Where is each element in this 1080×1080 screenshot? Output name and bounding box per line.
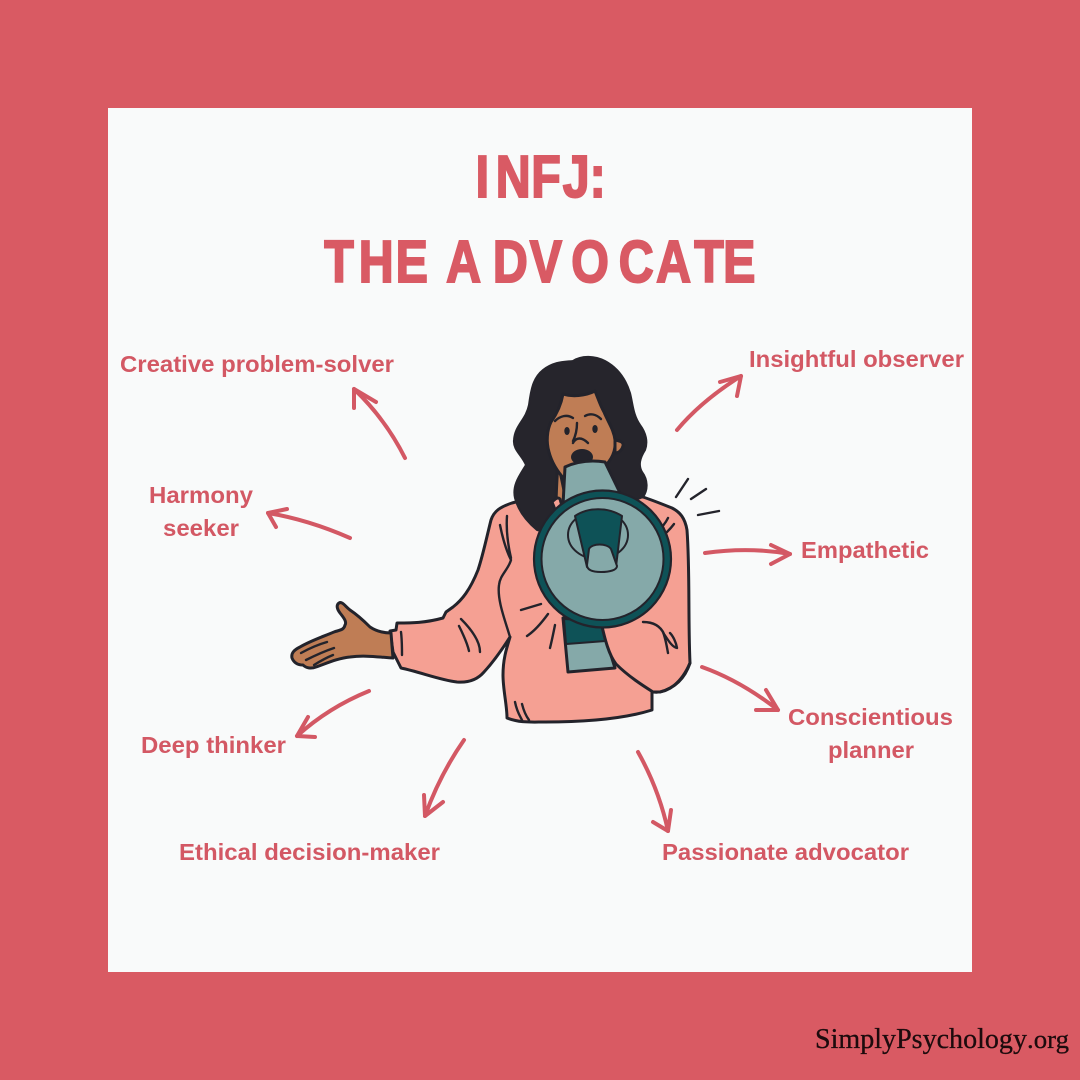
collar <box>552 498 562 512</box>
footer: source credit: SimplyPsychology <box>815 1023 1027 1055</box>
label: creative problem-solver: Creative problem-solver <box>120 351 394 377</box>
arrow: conscientious planner <box>702 667 778 710</box>
sweater fold lines <box>401 516 674 720</box>
arrow: deep thinker <box>297 691 369 737</box>
label: conscientious planner <box>788 704 953 763</box>
label: ethical decision-maker: Ethical decision-maker <box>179 839 440 865</box>
title: THE ADVOCATE <box>324 230 755 295</box>
eyes and brows <box>555 414 601 443</box>
label: passionate advocator: Passionate advocator <box>662 839 909 865</box>
arrow: insightful observer <box>677 376 741 430</box>
illustration: woman with megaphone <box>292 357 719 722</box>
sound lines <box>676 479 719 515</box>
hand finger lines <box>301 642 334 665</box>
megaphone handle <box>563 618 615 672</box>
face <box>547 391 615 480</box>
arrow: harmony seeker <box>268 509 350 538</box>
neck <box>556 462 566 508</box>
forearm over handle <box>601 585 690 692</box>
label: insightful observer: Insightful observer <box>749 346 964 372</box>
arrow: creative problem-solver <box>354 389 405 458</box>
arrow: ethical decision-maker <box>424 740 464 816</box>
megaphone bell <box>534 490 671 628</box>
label: deep thinker: Deep thinker <box>141 732 286 758</box>
arrow: empathetic <box>705 545 790 564</box>
label: harmony seeker: Harmony <box>149 482 253 508</box>
ear <box>615 440 623 453</box>
megaphone tube <box>563 461 622 505</box>
hair <box>514 357 647 531</box>
sweater body <box>390 490 690 722</box>
arrow: passionate advocator <box>638 752 671 831</box>
label: harmony seeker: seeker <box>163 515 239 541</box>
hand <box>292 603 393 668</box>
title: INFJ: <box>476 145 606 210</box>
label: empathetic: Empathetic <box>801 537 929 563</box>
mouth <box>571 449 593 465</box>
label: conscientious planner: planner <box>828 737 914 763</box>
label: harmony seeker <box>149 482 253 541</box>
title <box>324 145 755 295</box>
label: conscientious planner: Conscientious <box>788 704 953 730</box>
footer: source credit: .org <box>1027 1025 1069 1054</box>
panel: white card <box>108 108 972 972</box>
